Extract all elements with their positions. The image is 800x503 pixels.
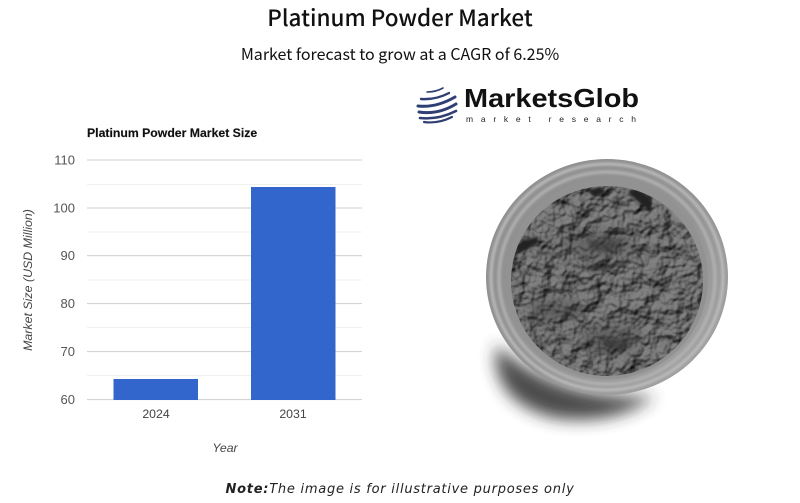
image: jar of platinum powder — [486, 159, 728, 420]
y axis labels — [53, 152, 75, 407]
bar 2031 — [251, 187, 336, 400]
jar rim — [486, 159, 728, 395]
logo: MarketsGlob — [418, 83, 639, 124]
title: Platinum Powder Market — [267, 1, 533, 33]
logo wordmark: MarketsGlob — [464, 83, 639, 113]
y axis labels: 60 — [61, 392, 75, 407]
y axis labels: 90 — [61, 248, 75, 263]
y axis labels: 110 — [54, 152, 75, 168]
bar chart — [21, 126, 362, 455]
powder — [508, 183, 708, 380]
jar shadow — [495, 345, 655, 420]
y axis labels: 100 — [53, 200, 75, 216]
x axis labels: 2024 — [142, 407, 170, 421]
icon: striped globe — [418, 88, 456, 122]
subtitle: Market forecast to grow at a CAGR of 6.25% — [241, 41, 559, 65]
x axis labels: 2031 — [279, 407, 307, 421]
y axis title: Market Size (USD Million) — [21, 209, 35, 351]
y axis labels: 80 — [61, 296, 75, 311]
x axis labels — [142, 407, 307, 421]
logo tagline: market research — [466, 114, 636, 124]
note: Note:The image is for illustrative purposes only — [225, 482, 575, 497]
y axis labels: 70 — [61, 344, 75, 359]
x axis title: Year — [212, 441, 239, 455]
bar 2024 — [114, 379, 198, 400]
chart title: Platinum Powder Market Size — [87, 126, 257, 140]
